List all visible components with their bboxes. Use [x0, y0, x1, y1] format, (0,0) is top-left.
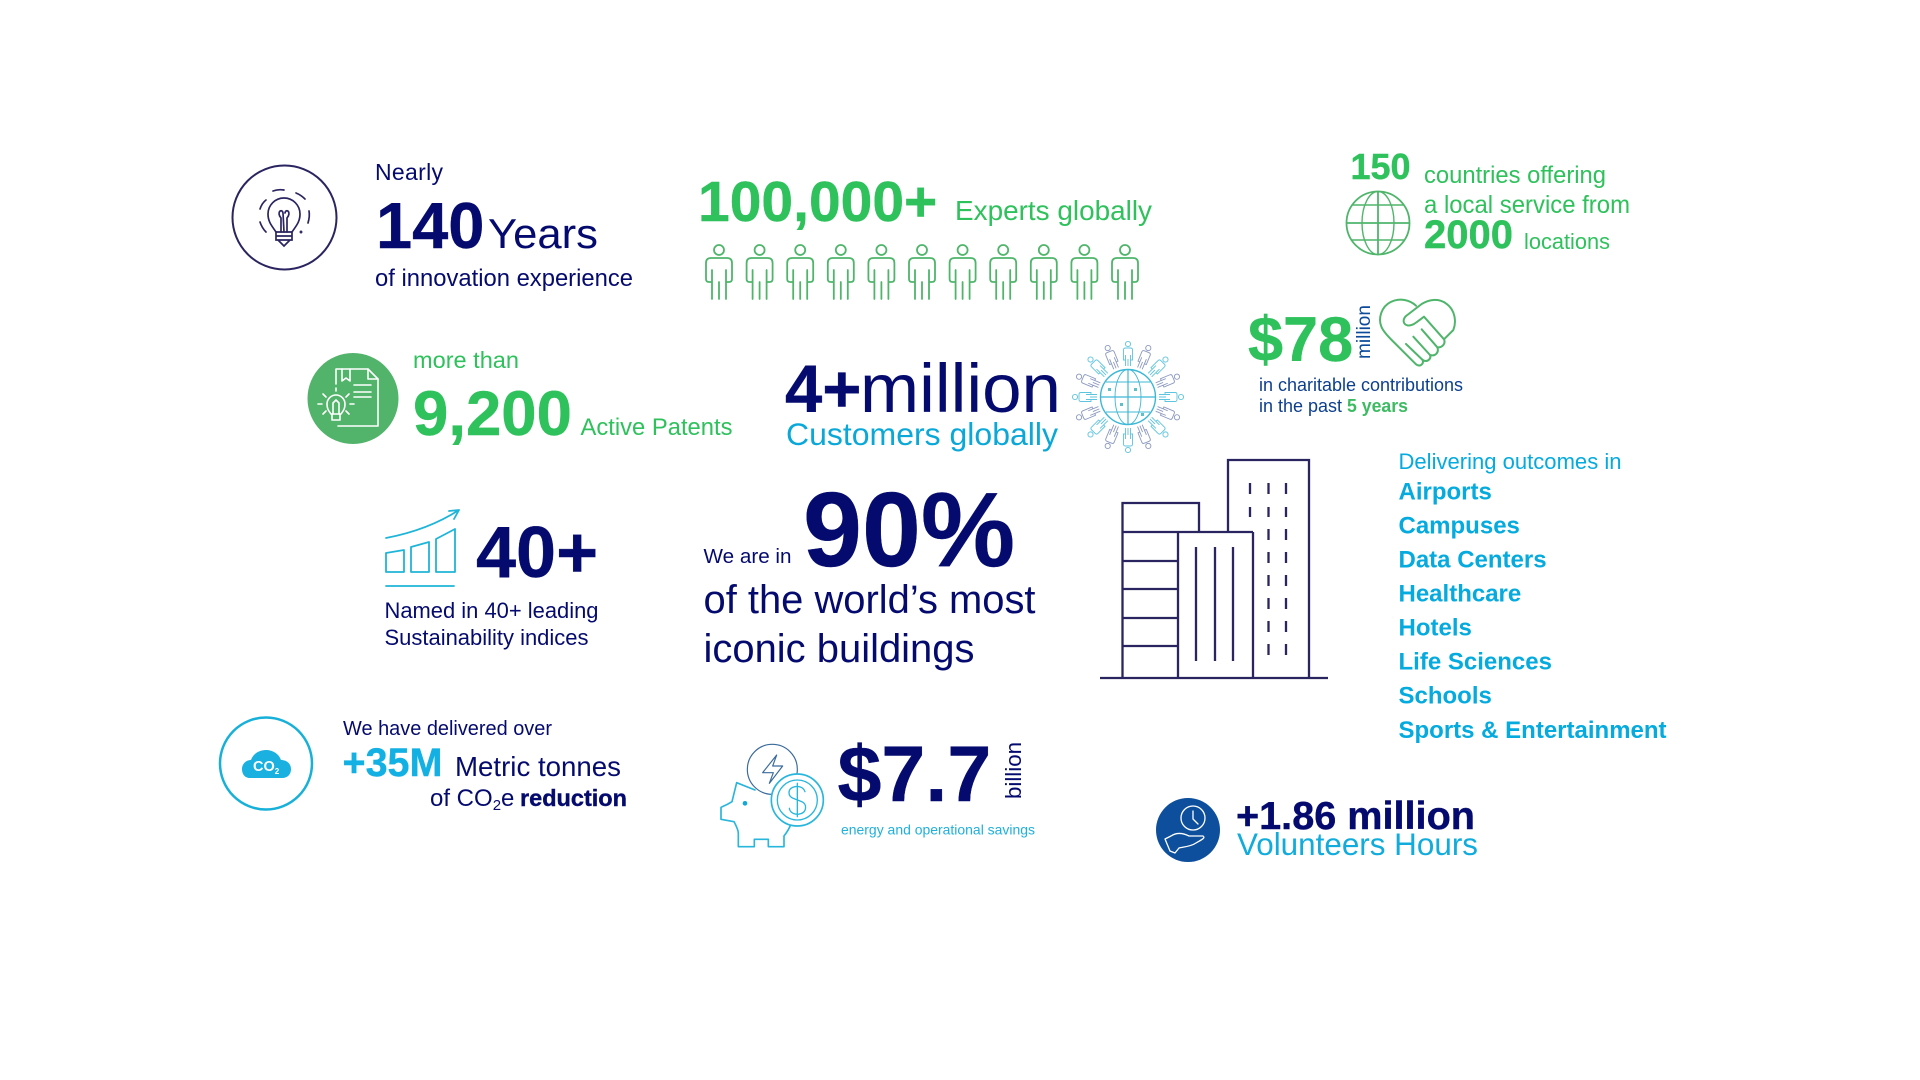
icon: globe — [1346, 192, 1410, 254]
number: 40+: 40+ — [476, 513, 598, 593]
number: $7.7: $7.7 — [838, 729, 991, 818]
icon: city buildings — [1100, 460, 1328, 678]
list items: Data Centers — [1398, 546, 1547, 574]
icon: hand with clock in blue circle — [1156, 798, 1220, 862]
list items: Campuses — [1398, 512, 1520, 540]
text: energy and operational savings: energy and operational savings — [841, 822, 1035, 838]
text: iconic buildings: iconic buildings — [704, 627, 974, 671]
text: We are in: We are in — [704, 545, 792, 568]
number: +35M: +35M — [342, 741, 442, 785]
number: 2000: 2000 — [1424, 213, 1513, 257]
stat: 9,200 active patents — [308, 347, 733, 449]
text: in the past 5 years: in the past — [1259, 395, 1343, 416]
text: in the past 5 years: 5 years — [1347, 395, 1408, 416]
number: 9,200: 9,200 — [413, 379, 572, 449]
text: of CO2e reduction: e — [501, 785, 514, 812]
list items: Schools — [1398, 682, 1492, 710]
number: +1.86 million: +1.86 million — [1236, 794, 1475, 838]
icon: light bulb in circle — [232, 166, 336, 270]
text: Volunteers Hours: Volunteers Hours — [1237, 827, 1478, 862]
text: Experts globally: Experts globally — [955, 195, 1152, 226]
number: 90%: 90% — [803, 471, 1015, 589]
icon: CO2 cloud in circle: 2 — [275, 767, 280, 776]
icon: CO2 cloud in circle — [220, 718, 312, 810]
icon row: eleven people — [706, 245, 1138, 299]
text: million: million — [860, 350, 1061, 427]
number: $78: $78 — [1248, 305, 1353, 375]
text: million (rotated): million — [1354, 305, 1375, 359]
text: of the world's most: of the world’s most — [704, 578, 1036, 622]
list items — [1398, 478, 1667, 744]
stat: +35M metric tonnes CO2e reduction — [220, 718, 627, 814]
text: countries offering: countries offering — [1424, 163, 1606, 189]
text: in charitable contributions: in charitable contributions — [1259, 374, 1463, 395]
text: Delivering outcomes in: Delivering outcomes in — [1398, 449, 1622, 474]
text: Named in 40+ leading: Named in 40+ leading — [384, 598, 598, 623]
stat: 140 years of innovation — [232, 159, 633, 292]
stat: +1.86 million volunteer hours — [1156, 794, 1478, 862]
icon: CO2 cloud in circle: CO — [253, 759, 275, 775]
text: a local service from: a local service from — [1424, 191, 1630, 219]
number: 140: 140 — [376, 189, 484, 262]
text: of CO2e reduction: 2 — [493, 797, 501, 814]
stat: $78 million charitable contributions — [1248, 300, 1463, 416]
text: of CO2e reduction: of CO — [430, 785, 493, 812]
text: Sustainability indices: Sustainability indices — [384, 625, 588, 650]
icon: handshake heart — [1380, 300, 1455, 365]
number: 100,000+: 100,000+ — [698, 170, 937, 234]
text: Active Patents: Active Patents — [580, 414, 733, 441]
text: more than: more than — [413, 347, 519, 373]
text: locations: locations — [1524, 229, 1610, 254]
text: in the past 5 years — [1259, 395, 1408, 416]
text: billion (rotated): billion — [1001, 742, 1026, 799]
text: of innovation experience: of innovation experience — [375, 266, 633, 292]
text: Customers globally: Customers globally — [786, 416, 1058, 452]
text: reduction (bold): reduction — [520, 785, 627, 811]
stat: 100,000+ experts — [698, 170, 1152, 299]
stat: 90% of iconic buildings — [704, 471, 1036, 671]
text: We have delivered over: We have delivered over — [343, 718, 552, 740]
stat: 4+ million customers — [785, 341, 1184, 453]
number: 150: 150 — [1350, 146, 1411, 187]
text: Years: Years — [488, 210, 598, 257]
icon: patent document in green circle — [308, 353, 398, 444]
stat: 40+ sustainability indices — [384, 510, 598, 650]
list items: Life Sciences — [1398, 648, 1552, 676]
icon: rising bar chart with arrow — [386, 510, 459, 586]
icon: globe surrounded by people — [1072, 341, 1184, 453]
number: 4+: 4+ — [785, 352, 861, 427]
list items: Healthcare — [1398, 580, 1521, 608]
stat: $7.7 billion savings — [721, 729, 1035, 847]
text: Metric tonnes: Metric tonnes — [455, 751, 621, 782]
list items: Hotels — [1398, 614, 1472, 642]
list items: Sports & Entertainment — [1398, 717, 1667, 744]
list: delivering outcomes by sector — [1398, 449, 1667, 744]
text: Nearly: Nearly — [375, 159, 444, 185]
icon: piggy bank with coins — [721, 744, 823, 847]
stat: 150 countries, 2000 locations — [1346, 146, 1630, 257]
list items: Airports — [1398, 478, 1492, 506]
